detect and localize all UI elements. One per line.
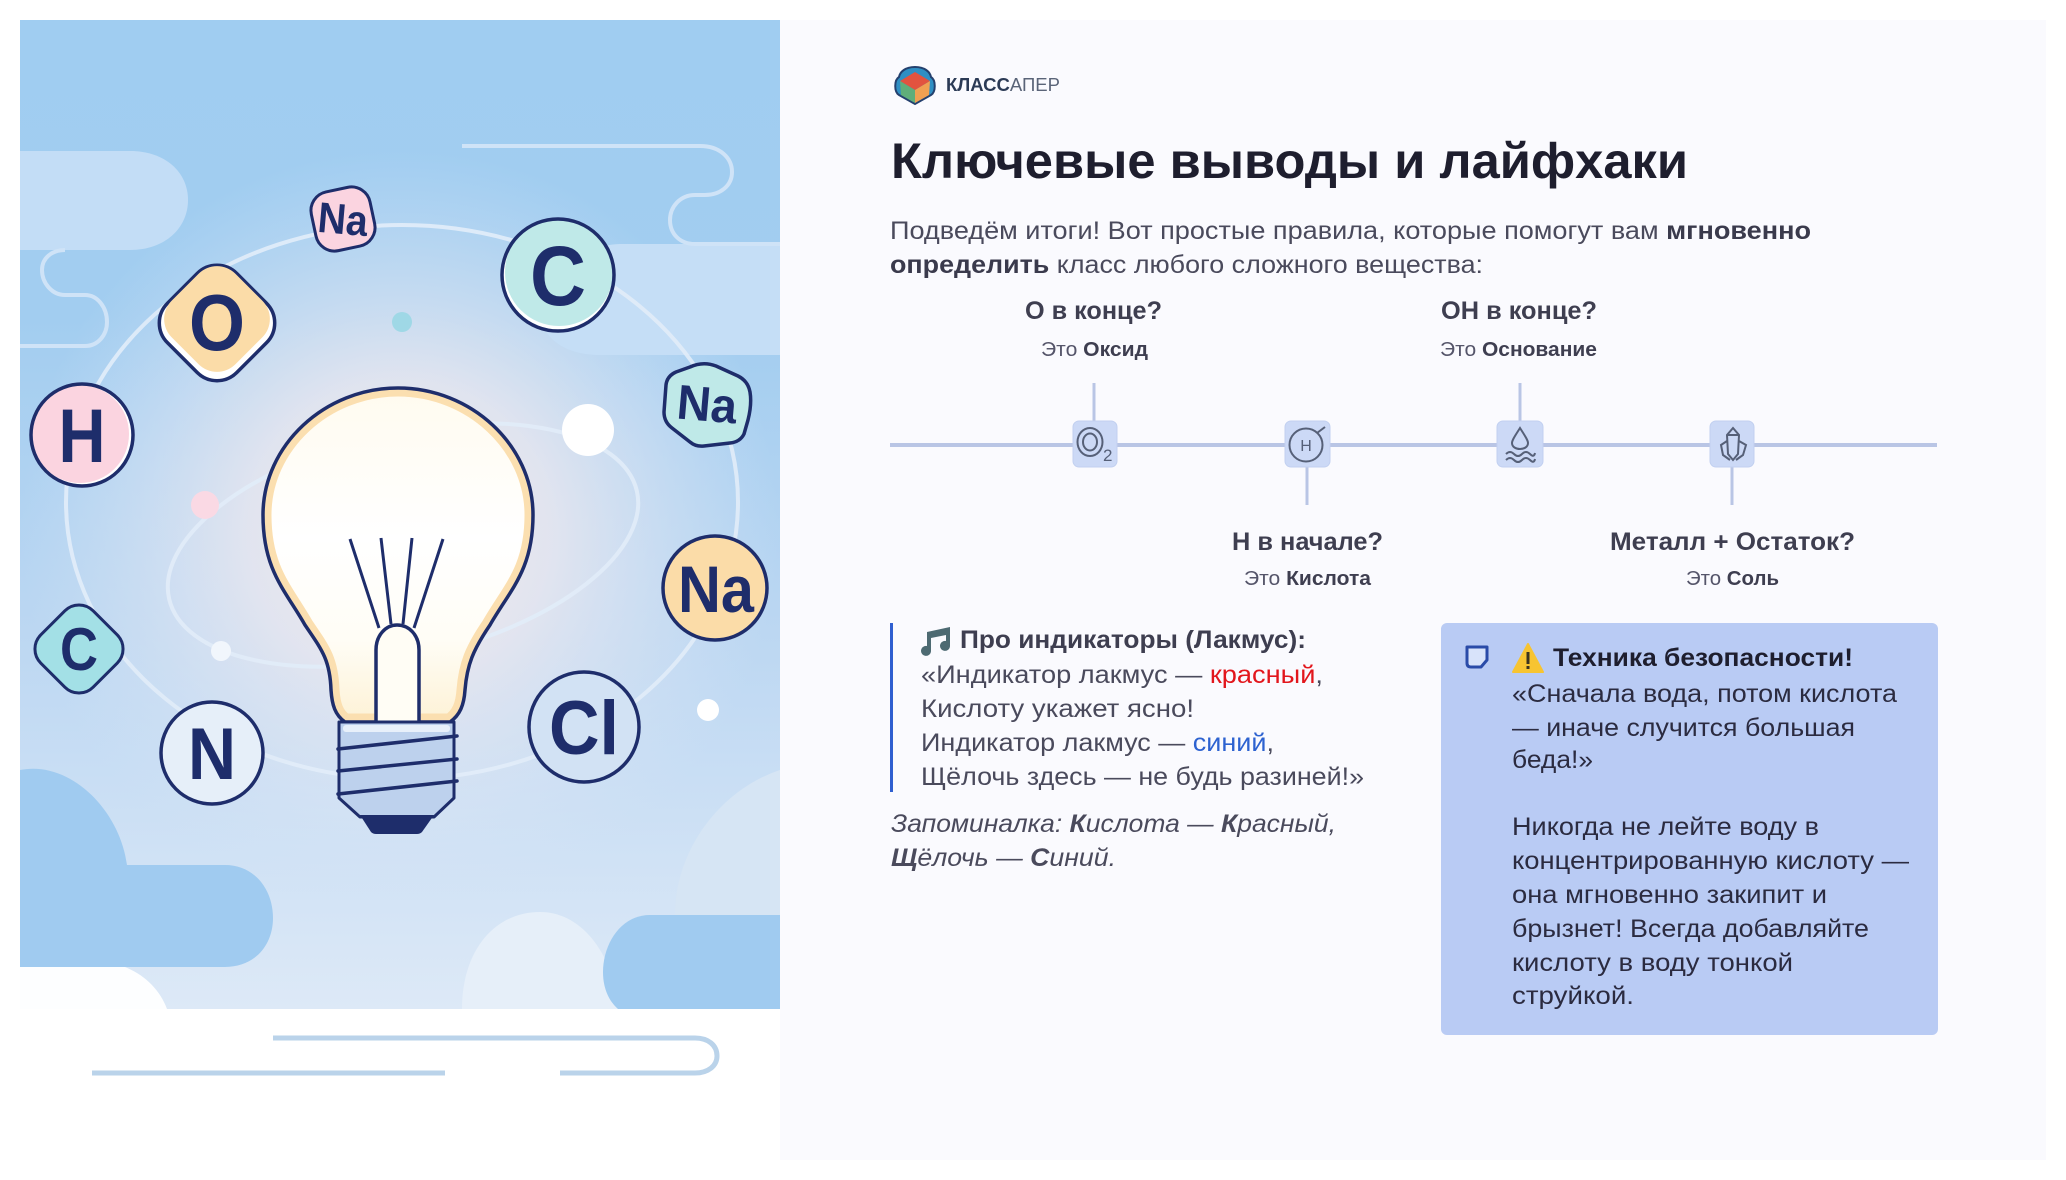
intro text: Подведём итоги! Вот простые правила, которые помогут вам мгновенно — [890, 217, 1811, 245]
atom: O orange diamond — [148, 254, 286, 392]
atom: C teal: C — [530, 229, 586, 323]
atom: Cl — [529, 672, 639, 782]
text block: mnemonic — [891, 810, 1336, 872]
timeline icon: oxygen — [1073, 421, 1117, 467]
panel: content background — [780, 20, 2046, 1160]
atom: C teal diamond — [27, 597, 131, 701]
decorative lines at bottom — [92, 1038, 717, 1073]
callout: safety: она мгновенно закипит и — [1512, 881, 1827, 909]
atom: Na pink: Na — [316, 194, 371, 246]
logo: КЛАССАПЕР — [946, 75, 1060, 95]
callout: safety — [1441, 623, 1938, 1035]
timeline label: salt: Металл + Остаток? — [1610, 528, 1855, 556]
intro text: определить класс любого сложного вещества: — [890, 251, 1483, 279]
callout: safety: Никогда не лейте воду в — [1512, 813, 1819, 841]
decorative particles — [191, 312, 719, 721]
timeline label: acid: Н в начале? — [1232, 528, 1383, 556]
timeline label: salt: Это Соль — [1686, 568, 1779, 590]
icon: musical note — [921, 627, 950, 656]
icon: light bulb — [263, 388, 533, 834]
text block: indicators rhyme: Щёлочь здесь — не будь разиней!» — [921, 763, 1364, 791]
timeline: axis — [890, 383, 1937, 505]
timeline icon: hydrogen: H — [1300, 438, 1312, 455]
callout: safety: Техника безопасности! — [1553, 644, 1853, 672]
timeline icon: oxygen: 2 — [1103, 446, 1112, 465]
atom: O orange diamond: O — [189, 278, 245, 367]
callout: safety: «Сначала вода, потом кислота — [1512, 680, 1897, 708]
text block: indicators rhyme: «Индикатор лакмус — красный , — [921, 661, 1323, 689]
timeline label: acid: Это Кислота — [1244, 568, 1372, 590]
atom: C teal diamond: C — [60, 616, 98, 683]
atom: Na pink — [307, 183, 379, 255]
atom: Na teal hexagon — [664, 364, 751, 446]
callout: safety: кислоту в воду тонкой — [1512, 949, 1793, 977]
timeline label: salt — [1610, 528, 1855, 590]
text block: mnemonic: Запоминалка: Кислота — Красный, — [891, 810, 1336, 838]
atom: H pink: H — [58, 394, 106, 479]
atom: Na orange: Na — [678, 552, 755, 626]
callout: safety: концентрированную кислоту — — [1512, 847, 1909, 875]
icon: warning triangle — [1513, 644, 1543, 672]
timeline label: base: Это Основание — [1440, 339, 1597, 361]
timeline label: base — [1440, 297, 1597, 361]
timeline label: acid — [1232, 528, 1383, 590]
text block: indicators rhyme: Про индикаторы (Лакмус): — [960, 626, 1306, 654]
timeline icon: water — [1497, 421, 1543, 467]
text block: mnemonic: Щёлочь — Синий. — [891, 844, 1116, 872]
atom: Na teal hexagon: Na — [675, 375, 740, 435]
callout: safety: брызнет! Всегда добавляйте — [1512, 915, 1869, 943]
timeline label: base: ОН в конце? — [1441, 297, 1597, 325]
timeline label: oxide: Это Оксид — [1041, 339, 1148, 361]
icon: sticky note — [1467, 647, 1487, 667]
timeline label: oxide: О в конце? — [1025, 297, 1162, 325]
timeline icon: crystal — [1710, 421, 1754, 467]
intro text — [890, 217, 1811, 279]
panel: illustration sky and clouds — [20, 20, 780, 1009]
atom: Na orange — [663, 536, 767, 640]
callout: safety: — иначе случится большая — [1512, 714, 1855, 742]
text block: indicators rhyme: Индикатор лакмус — синий, — [921, 729, 1274, 757]
timeline label: oxide — [1025, 297, 1162, 361]
atom: H pink — [31, 384, 133, 486]
callout: safety: беда!» — [1512, 746, 1593, 774]
text block: indicators rhyme: Кислоту укажет ясно! — [921, 695, 1194, 723]
atom: C teal — [502, 218, 614, 331]
orbit lines — [66, 225, 738, 779]
atom: Cl: Cl — [549, 686, 619, 771]
title: Ключевые выводы и лайфхаки — [891, 133, 1688, 189]
callout: safety: струйкой. — [1512, 982, 1634, 1010]
text block: indicators rhyme — [890, 623, 1364, 792]
atom: N — [161, 702, 263, 804]
timeline icon: hydrogen — [1285, 421, 1330, 467]
atom: N: N — [188, 714, 236, 795]
logo — [895, 67, 1060, 104]
